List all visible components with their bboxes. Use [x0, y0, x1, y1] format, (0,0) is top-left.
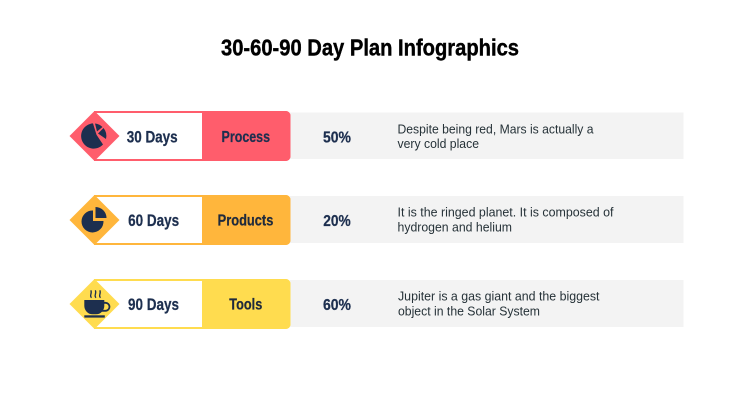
- description: Saturn: It is the ringed planet. It is composed of: [398, 206, 614, 220]
- description: Saturn: [398, 206, 614, 235]
- description: Mars: Despite being red, Mars is actually a: [398, 122, 594, 136]
- value: 60%: 60%: [323, 297, 351, 314]
- icon: coffee cup on yellow diamond: [70, 279, 120, 329]
- label: 30 Days: 30 Days: [127, 128, 178, 147]
- label box outline 60 days: [95, 196, 290, 244]
- category block: Tools: [202, 279, 290, 329]
- row: 60 days: [70, 195, 684, 245]
- panel: description band 30 days: [290, 112, 684, 159]
- icon: pie chart on orange diamond: [70, 195, 120, 245]
- description: Mars: very cold place: [398, 137, 479, 151]
- title: 30-60-90 Day Plan Infographics: [221, 35, 519, 61]
- description: Mars: [398, 122, 594, 151]
- category block: Process: [202, 111, 290, 161]
- category block: Products: [202, 195, 290, 245]
- label: 90 Days: 90 Days: [128, 295, 179, 314]
- label: 60 Days: 60 Days: [128, 211, 179, 230]
- row: 30 days: [70, 111, 684, 161]
- value: 20%: 20%: [323, 213, 351, 230]
- label box outline 30 days: [95, 112, 290, 160]
- description: Saturn: hydrogen and helium: [398, 221, 512, 235]
- category block: Process: Process: [222, 129, 270, 146]
- value: 50%: 50%: [323, 130, 351, 147]
- panel: description band 90 days: [290, 280, 684, 327]
- category block: Tools: Tools: [229, 296, 262, 313]
- description: Jupiter: [398, 290, 600, 318]
- panel: description band 60 days: [290, 196, 684, 243]
- row: 90 days: [70, 279, 684, 329]
- category block: Products: Products: [218, 212, 273, 229]
- label box outline 90 days: [95, 280, 290, 328]
- description: Jupiter: object in the Solar System: [398, 304, 540, 318]
- icon: pie chart on red diamond: [70, 111, 120, 161]
- description: Jupiter: Jupiter is a gas giant and the biggest: [398, 290, 600, 304]
